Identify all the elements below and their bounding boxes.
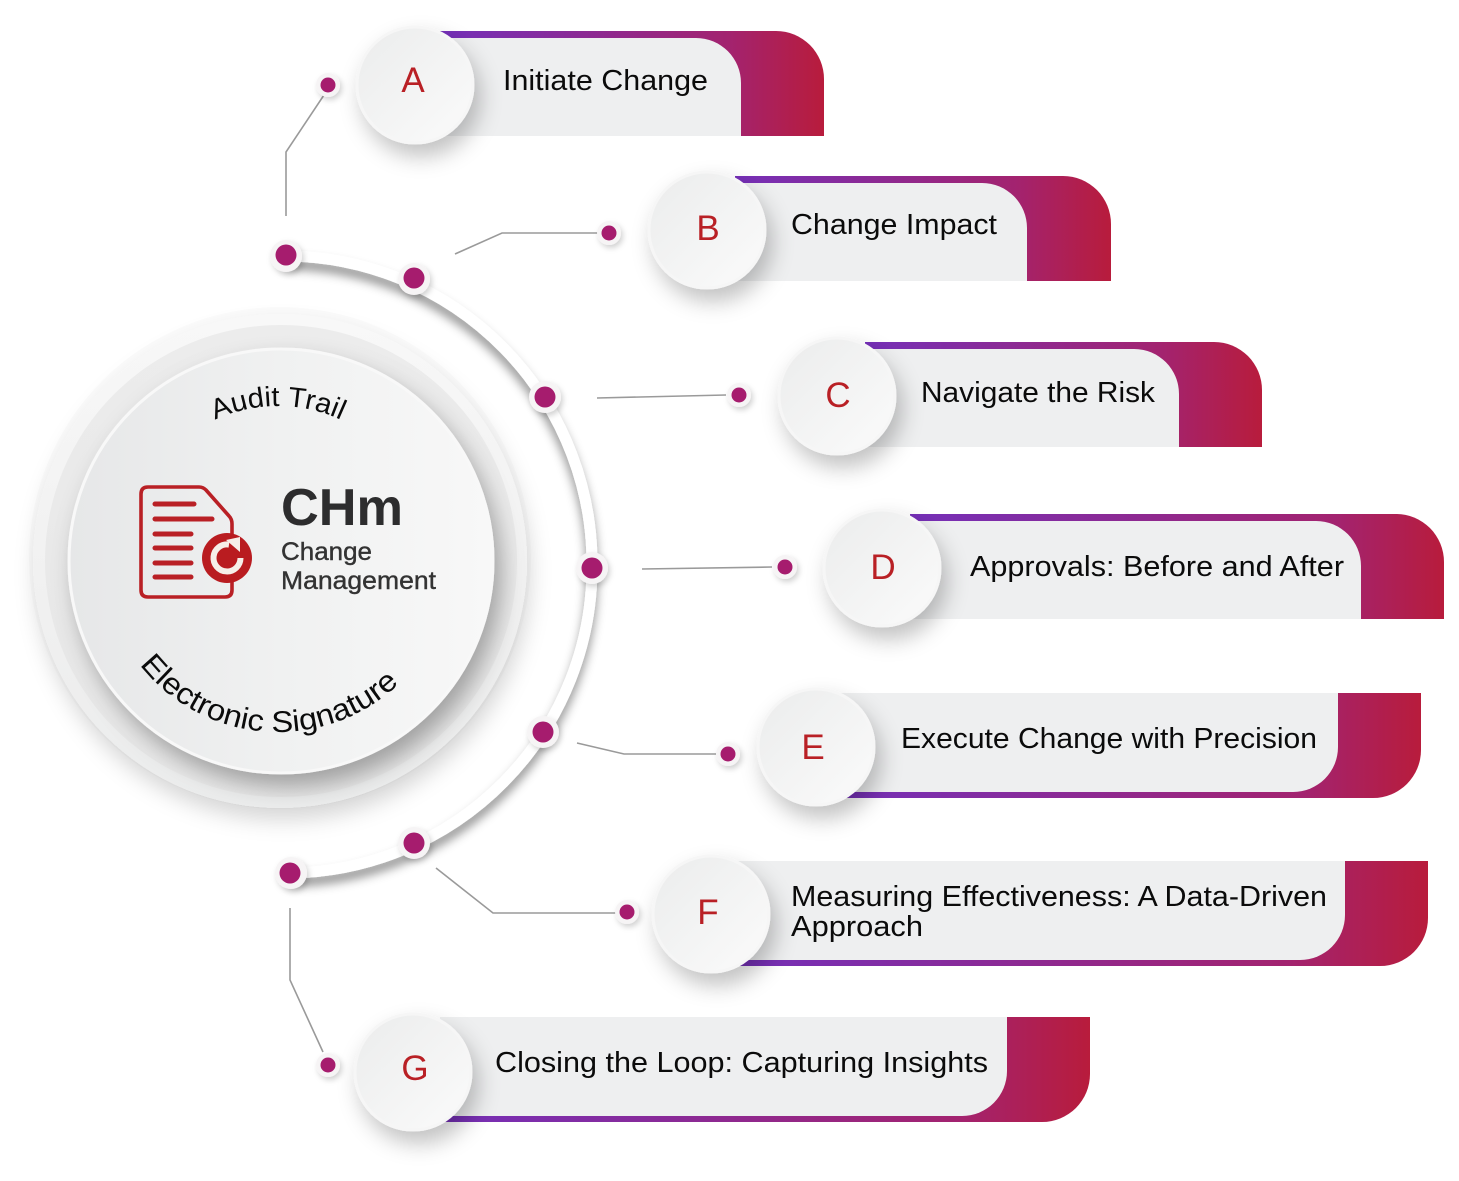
connector bbox=[455, 233, 598, 254]
timeline arc with nodes bbox=[270, 240, 608, 889]
ribbon face bbox=[440, 38, 741, 136]
node 3 bbox=[529, 381, 561, 413]
connector dot bbox=[316, 1053, 340, 1077]
logo wordmark: CHm: CHm bbox=[281, 479, 403, 537]
connector dot bbox=[316, 73, 340, 97]
central hub bbox=[28, 313, 538, 828]
badge bbox=[649, 172, 765, 288]
ribbon face bbox=[440, 1017, 1007, 1116]
badge bbox=[653, 856, 769, 972]
connector bbox=[290, 908, 323, 1052]
badge bbox=[824, 510, 940, 626]
ribbon bbox=[440, 31, 824, 136]
label: Execute Change with Precision bbox=[901, 723, 1317, 755]
ribbon face bbox=[735, 183, 1027, 281]
node 1 bbox=[270, 240, 302, 272]
badge letter: A bbox=[401, 61, 425, 100]
curved label: electronic signature: Electronic Signature bbox=[141, 653, 396, 736]
badge bbox=[779, 338, 895, 454]
connector dot bbox=[773, 555, 797, 579]
logo subtitle: management: Management bbox=[281, 567, 436, 595]
ribbon bbox=[865, 342, 1262, 447]
badge bbox=[355, 1014, 471, 1130]
logo subtitle: change: Change bbox=[281, 538, 372, 566]
badge letter: F bbox=[697, 893, 719, 932]
badge letter: D bbox=[870, 548, 896, 587]
badge letter: B bbox=[696, 209, 720, 248]
label: Navigate the Risk bbox=[921, 377, 1156, 409]
label: Approach bbox=[791, 911, 923, 943]
banner F: Measuring Effectiveness bbox=[436, 856, 1428, 972]
label bbox=[791, 881, 1327, 943]
ribbon bbox=[735, 176, 1111, 281]
banner G: Closing the Loop bbox=[290, 908, 1090, 1130]
curved label: audit trail: Audit Trail bbox=[214, 386, 348, 420]
banner E: Execute Change bbox=[577, 689, 1421, 805]
connector dot bbox=[727, 383, 751, 407]
node 4 bbox=[576, 552, 608, 584]
arc stroke bbox=[286, 256, 592, 873]
ribbon bbox=[735, 861, 1428, 966]
node 2 bbox=[398, 263, 430, 295]
label: Closing the Loop: Capturing Insights bbox=[495, 1047, 988, 1079]
node 7 bbox=[275, 857, 307, 889]
badge letter: C bbox=[825, 376, 851, 415]
ribbon bbox=[840, 693, 1421, 798]
badge bbox=[357, 27, 473, 143]
banner C: Navigate the Risk bbox=[597, 338, 1262, 454]
label: Approvals: Before and After bbox=[970, 551, 1344, 583]
node 6 bbox=[398, 827, 430, 859]
ribbon face bbox=[840, 693, 1338, 792]
banner A: Initiate Change bbox=[286, 27, 824, 216]
outer halo disc bbox=[29, 307, 531, 809]
badge bbox=[758, 689, 874, 805]
connector bbox=[597, 395, 726, 398]
banner D: Approvals bbox=[642, 510, 1444, 626]
connector dot bbox=[716, 742, 740, 766]
badge letter: E bbox=[801, 728, 825, 767]
outer ring bbox=[33, 314, 527, 808]
connector bbox=[286, 95, 324, 216]
node 5 bbox=[527, 716, 559, 748]
connector bbox=[642, 567, 772, 569]
connector dot bbox=[597, 221, 621, 245]
label: Measuring Effectiveness: A Data-Driven bbox=[791, 881, 1327, 913]
label: Change Impact bbox=[791, 209, 997, 241]
connector bbox=[436, 868, 616, 913]
middle ring bbox=[45, 325, 517, 797]
label: Initiate Change bbox=[503, 65, 708, 97]
connector bbox=[577, 743, 716, 754]
inner disc bbox=[69, 349, 493, 773]
ribbon face bbox=[910, 521, 1361, 619]
ribbon face bbox=[735, 861, 1345, 960]
ribbon bbox=[910, 514, 1444, 619]
connector dot bbox=[615, 900, 639, 924]
ribbon bbox=[440, 1017, 1090, 1122]
banner B: Change Impact bbox=[455, 172, 1111, 288]
badge letter: G bbox=[401, 1049, 429, 1088]
icon: document with refresh bbox=[141, 487, 252, 597]
ribbon face bbox=[865, 349, 1179, 447]
